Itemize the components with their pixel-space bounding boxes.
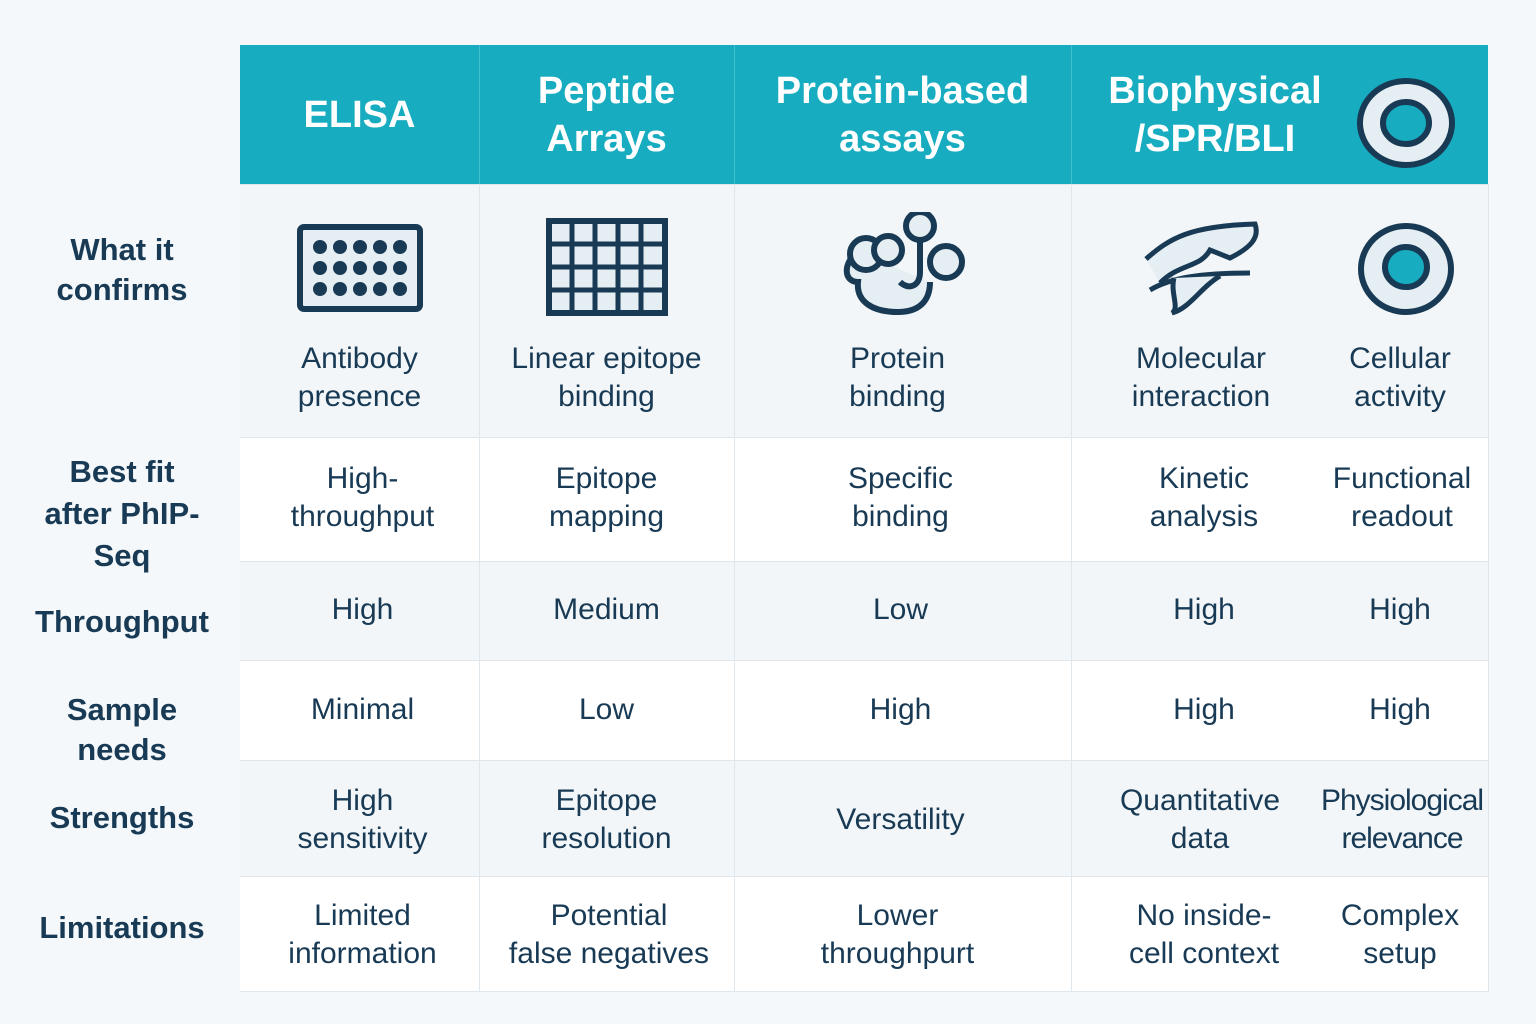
icon: peptide grid (546, 218, 668, 316)
text: Strengths (50, 800, 194, 835)
icon: protein (844, 212, 965, 315)
text: No inside- (1136, 899, 1272, 932)
text: Specific (848, 462, 953, 495)
text: mapping (549, 500, 664, 533)
row: limitations: information (288, 937, 437, 970)
text: needs (77, 732, 167, 767)
text: Best fit (69, 454, 175, 489)
icon: header cell ring (1357, 78, 1455, 168)
text: throughpurt (821, 937, 974, 970)
header: Biophysical/SPR/BLI (1108, 70, 1322, 160)
text: Potential (551, 899, 667, 932)
row: sample needs: Minimal (311, 693, 414, 726)
text: Cellular (1349, 342, 1451, 375)
text: interaction (1132, 380, 1270, 413)
text: High (1369, 693, 1431, 726)
text: High (1369, 593, 1431, 626)
row: throughput: High (332, 593, 393, 626)
text: data (1171, 822, 1229, 855)
row labels: confirms (57, 272, 187, 307)
text: cell context (1129, 937, 1279, 970)
header: Biophysical/SPR/BLI: /SPR/BLI (1135, 118, 1295, 160)
text: Versatility (836, 803, 965, 836)
text: Quantitative (1120, 784, 1280, 817)
header: ELISA: ELISA (304, 94, 415, 136)
row: strengths: High (332, 784, 393, 817)
row labels: What it (70, 232, 174, 267)
text: High (1173, 593, 1235, 626)
row labels (57, 232, 187, 307)
text: Epitope (556, 462, 657, 495)
text: relevance (1341, 822, 1463, 855)
header: Peptide Arrays (538, 70, 675, 160)
text: binding (849, 380, 946, 413)
text: activity (1354, 380, 1446, 413)
text: Medium (553, 593, 660, 626)
text: Low (579, 693, 634, 726)
text: Complex (1341, 899, 1459, 932)
icon: ELISA plate (297, 224, 423, 312)
row: best fit: High- (327, 462, 398, 495)
row: what it confirms: presence (298, 380, 421, 413)
text: Seq (94, 538, 150, 573)
row backgrounds (240, 184, 1488, 437)
header: Protein-based assays: assays (839, 118, 966, 160)
row: best fit: throughput (291, 500, 434, 533)
header: Peptide Arrays: Peptide (538, 70, 675, 112)
icon: cell (1358, 223, 1454, 315)
text: false negatives (509, 937, 709, 970)
row: best fit (291, 462, 434, 533)
text: Lower (857, 899, 938, 932)
text: Functional (1333, 462, 1471, 495)
text: Throughput (35, 604, 209, 639)
text: Epitope (556, 784, 657, 817)
row: strengths: sensitivity (297, 822, 428, 855)
row: limitations (288, 899, 437, 970)
text: Kinetic (1159, 462, 1249, 495)
header: Protein-based assays: Protein-based (776, 70, 1029, 112)
text: High (870, 693, 931, 726)
text: analysis (1150, 500, 1258, 533)
row: what it confirms: Antibody (301, 342, 418, 375)
row: what it confirms (298, 342, 421, 413)
text: after PhIP- (44, 496, 200, 531)
text: Sample (67, 692, 177, 727)
icon: molecular interaction (1144, 222, 1259, 316)
text: Linear epitope (511, 342, 702, 375)
row: limitations: Limited (314, 899, 411, 932)
text: readout (1351, 500, 1453, 533)
text: binding (852, 500, 949, 533)
text: Limitations (39, 910, 205, 945)
text: Physiological (1321, 784, 1483, 817)
header: Biophysical/SPR/BLI: Biophysical (1108, 70, 1322, 112)
row: strengths (297, 784, 428, 855)
text: Protein (850, 342, 945, 375)
header bar (240, 45, 1488, 184)
text: resolution (541, 822, 672, 855)
header: Protein-based assays (776, 70, 1029, 160)
text: binding (558, 380, 655, 413)
text: High (1173, 693, 1235, 726)
text: setup (1363, 937, 1437, 970)
text: Molecular (1136, 342, 1266, 375)
text: Low (873, 593, 928, 626)
header: Peptide Arrays: Arrays (546, 118, 667, 160)
